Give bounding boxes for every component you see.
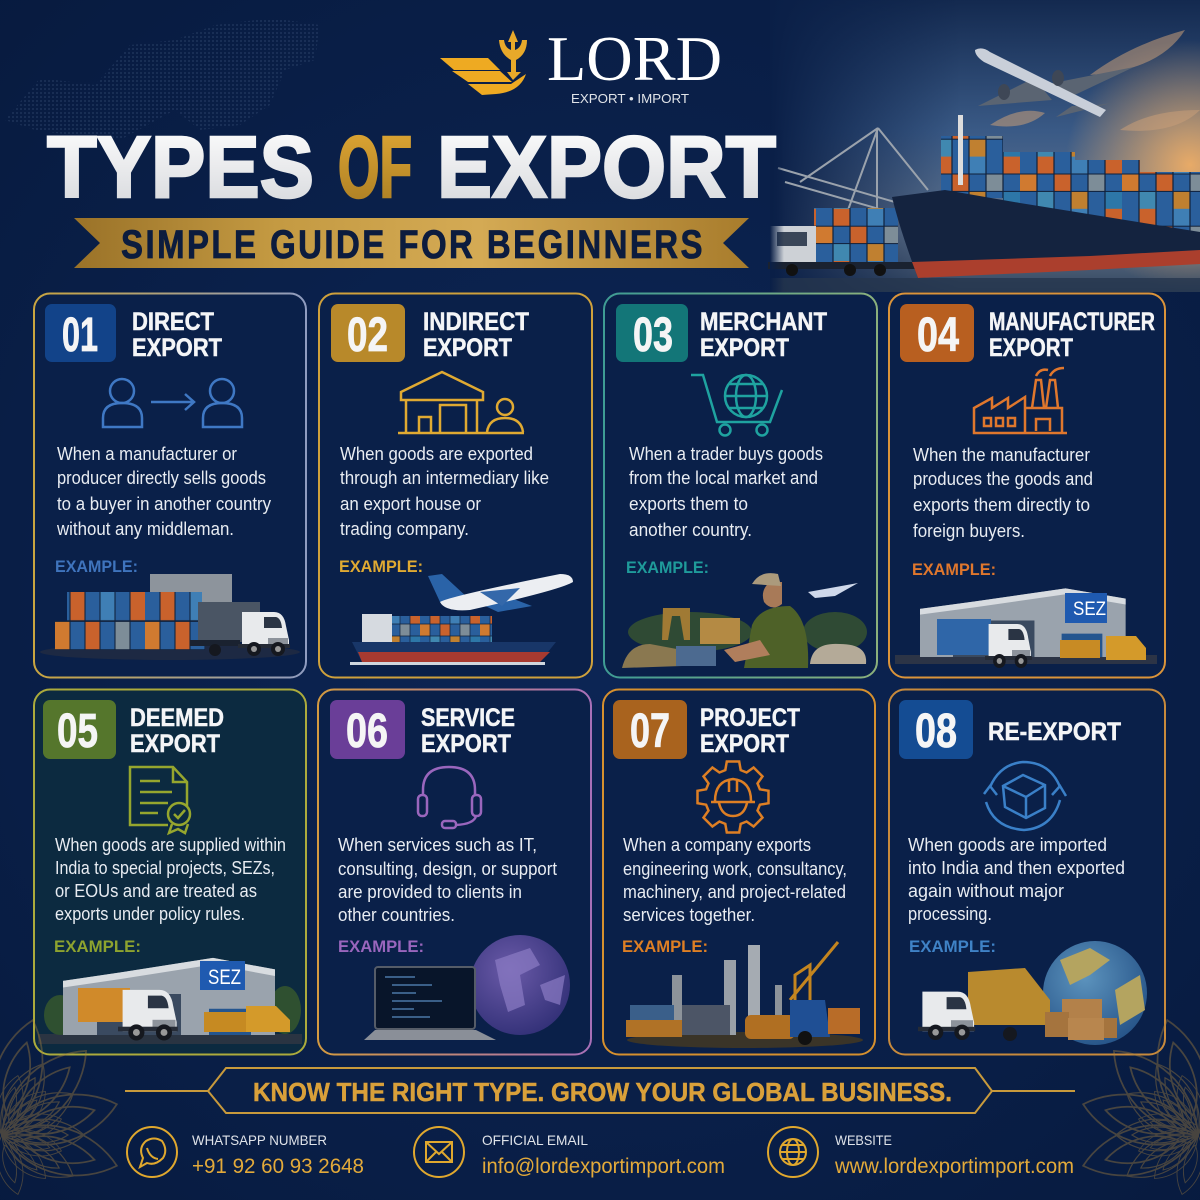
description xyxy=(56,444,271,539)
description: When a manufacturer or xyxy=(57,444,237,464)
contact: website: WEBSITE xyxy=(835,1132,892,1148)
illustration: trader with goods xyxy=(622,573,867,668)
contact: whatsapp: WHATSAPP NUMBER xyxy=(192,1132,327,1148)
description: exports them directly to xyxy=(913,495,1090,515)
heading: INDIRECT xyxy=(423,308,529,336)
heading: EXPORT xyxy=(421,730,511,758)
icon: headset xyxy=(418,767,481,828)
description: When services such as IT, xyxy=(338,835,537,855)
badge 06 xyxy=(330,700,405,759)
panel: 01 direct export xyxy=(34,294,306,678)
illustration: plane over ship xyxy=(350,574,573,665)
badge 05 xyxy=(43,700,116,759)
badge 04 xyxy=(900,304,974,362)
description xyxy=(338,835,557,925)
illustration: containers and truck xyxy=(40,574,300,660)
heading xyxy=(132,308,222,362)
decorative mandala left xyxy=(0,1014,123,1197)
example label: EXAMPLE: xyxy=(338,937,424,956)
example label: EXAMPLE: xyxy=(909,937,996,956)
description: foreign buyers. xyxy=(913,521,1025,541)
description: engineering work, consultancy, xyxy=(623,859,847,879)
heading: PROJECT xyxy=(700,704,800,732)
icon: certificate document xyxy=(130,767,190,833)
icon: globe xyxy=(768,1127,818,1177)
example label: EXAMPLE: xyxy=(55,557,138,576)
logo: LORD xyxy=(547,23,722,94)
description: from the local market and xyxy=(629,468,818,488)
badge 06: 06 xyxy=(346,705,388,758)
description: When a company exports xyxy=(623,835,811,855)
description: When a trader buys goods xyxy=(629,444,823,464)
description: an export house or xyxy=(340,494,481,514)
panel: 04 manufacturer export xyxy=(889,294,1165,678)
icon: shopping cart with globe xyxy=(691,375,782,436)
logo xyxy=(440,23,722,106)
icon: warehouse and agent xyxy=(398,372,524,433)
container ship xyxy=(892,115,1200,278)
title: OF xyxy=(338,119,412,216)
illustration: truck, boxes and globe xyxy=(918,941,1147,1045)
crane xyxy=(778,128,928,216)
example label: EXAMPLE: xyxy=(54,937,141,956)
contact: website xyxy=(768,1127,1074,1178)
heading xyxy=(423,308,529,362)
badge 03: 03 xyxy=(633,309,673,362)
example label: EXAMPLE: xyxy=(339,557,423,576)
description: When the manufacturer xyxy=(913,445,1090,465)
description: to a buyer in another country xyxy=(57,494,271,514)
title: EXPORT xyxy=(437,119,776,216)
badge 05: 05 xyxy=(57,705,98,758)
decorative mandala right xyxy=(1077,1014,1200,1197)
description: without any middleman. xyxy=(56,519,234,539)
panel: 03 merchant export xyxy=(604,294,877,678)
description xyxy=(55,835,286,924)
contact: email: OFFICIAL EMAIL xyxy=(482,1132,588,1148)
badge 02 xyxy=(331,304,405,362)
description: When goods are supplied within xyxy=(55,835,286,855)
heading: MANUFACTURER xyxy=(989,308,1155,336)
description: India to special projects, SEZs, xyxy=(55,858,275,878)
badge 01 xyxy=(45,304,116,362)
description xyxy=(340,444,549,539)
example label: EXAMPLE: xyxy=(622,937,708,956)
icon: envelope xyxy=(414,1127,464,1177)
example label: EXAMPLE: xyxy=(912,560,996,579)
contact: email xyxy=(414,1127,725,1178)
description: again without major xyxy=(908,881,1064,901)
heading: EXPORT xyxy=(423,334,512,362)
contact: whatsapp: +91 92 60 93 2648 xyxy=(192,1155,364,1178)
badge 01: 01 xyxy=(62,309,98,362)
description: services together. xyxy=(623,905,755,925)
plane xyxy=(975,48,1134,117)
description: or EOUs and are treated as xyxy=(55,881,257,901)
heading: EXPORT xyxy=(989,334,1073,362)
icon: whatsapp xyxy=(127,1127,177,1177)
panel: 06 service export xyxy=(318,690,591,1054)
badge 07: 07 xyxy=(630,705,670,758)
description: trading company. xyxy=(340,519,469,539)
illustration: SEZ facility: SEZ xyxy=(1073,599,1106,620)
description: processing. xyxy=(908,904,992,924)
description: consulting, design, or support xyxy=(338,859,557,879)
badge 03 xyxy=(616,304,688,362)
dotted world map xyxy=(5,18,320,140)
contact: website: www.lordexportimport.com xyxy=(834,1155,1074,1178)
title xyxy=(47,119,776,216)
panel: 05 deemed export xyxy=(34,690,306,1054)
description: are provided to clients in xyxy=(338,882,522,902)
heading xyxy=(700,704,800,758)
icon: person to person xyxy=(103,379,242,427)
icon: trident and wings xyxy=(440,30,527,95)
heading: DEEMED xyxy=(130,704,224,732)
panel: 08 re-export xyxy=(889,690,1165,1054)
description: exports them to xyxy=(629,494,748,514)
tagline banner: KNOW THE RIGHT TYPE. GROW YOUR GLOBAL BUSINESS. xyxy=(253,1077,952,1107)
badge 08: 08 xyxy=(915,705,957,758)
heading xyxy=(421,704,515,758)
heading xyxy=(700,308,827,362)
description: machinery, and project-related xyxy=(623,882,846,902)
icon: box with cycle arrows xyxy=(984,762,1066,830)
description: other countries. xyxy=(338,905,455,925)
heading: EXPORT xyxy=(700,334,789,362)
heading: EXPORT xyxy=(700,730,789,758)
port containers and truck xyxy=(768,208,918,276)
description xyxy=(623,835,847,925)
description: into India and then exported xyxy=(908,858,1125,878)
illustration: SEZ facility xyxy=(38,958,302,1044)
description: producer directly sells goods xyxy=(57,468,266,488)
description: When goods are exported xyxy=(340,444,533,464)
badge 07 xyxy=(613,700,687,759)
heading: EXPORT xyxy=(132,334,222,362)
description xyxy=(629,444,823,540)
icon: gear with helmet xyxy=(698,762,768,832)
illustration: SEZ facility xyxy=(895,588,1157,668)
badge 02: 02 xyxy=(347,309,388,362)
heading: DIRECT xyxy=(132,308,214,336)
heading: EXPORT xyxy=(130,730,220,758)
description: another country. xyxy=(629,520,752,540)
description: exports under policy rules. xyxy=(55,904,245,924)
tagline banner xyxy=(125,1068,1075,1113)
contact: email: info@lordexportimport.com xyxy=(482,1155,725,1178)
badge 04: 04 xyxy=(917,309,959,362)
description: When goods are imported xyxy=(908,835,1107,855)
heading xyxy=(989,308,1155,362)
title: TYPES xyxy=(47,119,314,216)
heading: SERVICE xyxy=(421,704,515,732)
description: through an intermediary like xyxy=(340,468,549,488)
description: produces the goods and xyxy=(913,469,1093,489)
panel: 07 project export xyxy=(603,690,875,1054)
illustration: refinery and machinery xyxy=(626,942,863,1048)
heading: RE-EXPORT xyxy=(988,718,1121,746)
panel: 02 indirect export xyxy=(319,294,592,678)
heading: MERCHANT xyxy=(700,308,827,336)
illustration: SEZ facility: SEZ xyxy=(208,966,241,989)
description xyxy=(913,445,1093,541)
subtitle ribbon: SIMPLE GUIDE FOR BEGINNERS xyxy=(121,223,705,267)
description xyxy=(908,835,1125,924)
contact: whatsapp xyxy=(127,1127,364,1178)
hero photo: ship, port and plane xyxy=(768,0,1200,292)
example label: EXAMPLE: xyxy=(626,558,709,577)
icon: factory xyxy=(974,368,1067,433)
heading xyxy=(130,704,224,758)
illustration: laptop and globe xyxy=(364,935,570,1040)
logo: EXPORT • IMPORT xyxy=(571,92,689,106)
badge 08 xyxy=(899,700,973,759)
